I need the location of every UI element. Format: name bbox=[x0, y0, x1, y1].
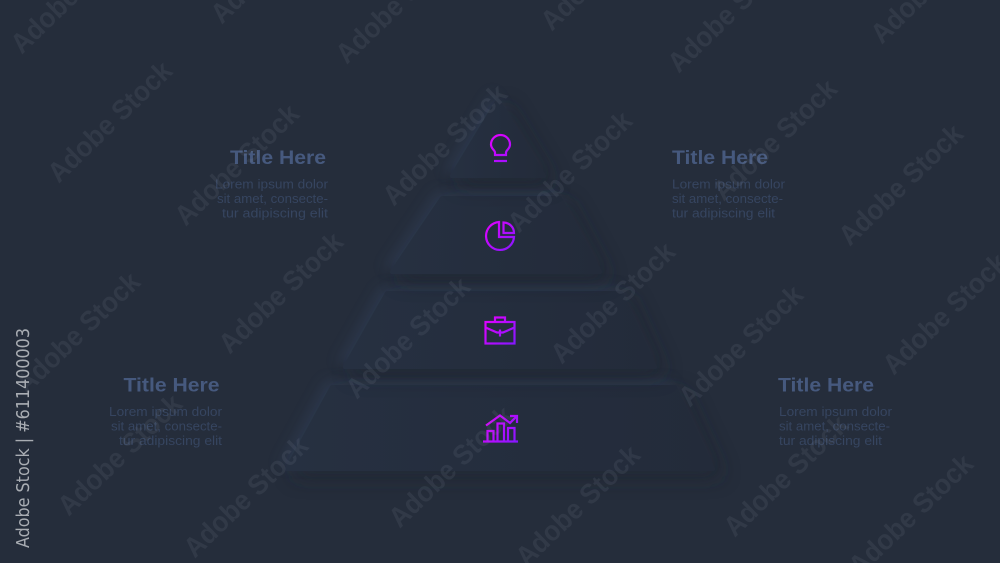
text block: bottom left: Title Here bbox=[124, 376, 220, 396]
text block: bottom right: sit amet, consecte- bbox=[779, 418, 890, 434]
icon: pie chart bbox=[486, 222, 514, 250]
watermark pattern: Adobe Stock bbox=[177, 430, 314, 563]
watermark pattern: Adobe Stock bbox=[168, 98, 305, 231]
watermark pattern: Adobe Stock bbox=[339, 271, 476, 404]
watermark pattern: Adobe Stock bbox=[41, 55, 178, 188]
icon: briefcase bbox=[486, 318, 514, 344]
watermark pattern: Adobe Stock bbox=[51, 388, 188, 521]
watermark pattern: Adobe Stock bbox=[706, 73, 843, 206]
text block: bottom right: Title Here bbox=[778, 376, 874, 396]
text block: top right: Title Here bbox=[672, 148, 768, 169]
text block: top right: tur adipiscing elit bbox=[672, 206, 775, 220]
text block: bottom right: Lorem ipsum dolor bbox=[779, 404, 893, 419]
text block: bottom left: tur adipiscing elit bbox=[119, 433, 222, 448]
text block: bottom left: sit amet, consecte- bbox=[111, 418, 222, 434]
watermark pattern: Adobe Stock bbox=[9, 266, 146, 399]
tier 4: bottom layer bbox=[281, 382, 720, 475]
watermark pattern: Adobe Stock bbox=[717, 409, 854, 542]
text block: bottom left bbox=[109, 376, 223, 448]
watermark pattern: Adobe Stock bbox=[544, 236, 681, 369]
text block: bottom right: tur adipiscing elit bbox=[779, 433, 882, 448]
text block: top right: sit amet, consecte- bbox=[672, 191, 783, 206]
text block: top right: Lorem ipsum dolor bbox=[672, 176, 786, 192]
text block: top right bbox=[672, 148, 786, 220]
text block: bottom right bbox=[778, 376, 893, 448]
text block: top left: tur adipiscing elit bbox=[222, 206, 328, 220]
tier 2: pie chart layer bbox=[386, 193, 607, 278]
watermark pattern: Adobe Stock bbox=[376, 78, 513, 211]
watermark pattern: Adobe Stock bbox=[212, 226, 349, 359]
text block: top left bbox=[215, 148, 329, 220]
tier 1: top triangle bbox=[446, 95, 551, 182]
icon: growth chart bbox=[483, 416, 518, 442]
icon: light bulb bbox=[491, 135, 510, 161]
watermark pattern: Adobe Stock bbox=[832, 118, 969, 251]
text block: top left: sit amet, consecte- bbox=[217, 191, 328, 206]
stock id label: Adobe Stock | #611400003 bbox=[13, 328, 34, 548]
watermark pattern: Adobe Stock bbox=[382, 400, 519, 533]
watermark pattern: Adobe Stock bbox=[672, 279, 809, 412]
text block: bottom left: Lorem ipsum dolor bbox=[109, 404, 223, 419]
tier 3: briefcase layer bbox=[339, 288, 662, 373]
watermark pattern: Adobe Stock bbox=[501, 105, 638, 238]
pyramid bbox=[281, 95, 720, 475]
text block: top left: Title Here bbox=[230, 148, 326, 169]
text block: top left: Lorem ipsum dolor bbox=[215, 176, 329, 192]
